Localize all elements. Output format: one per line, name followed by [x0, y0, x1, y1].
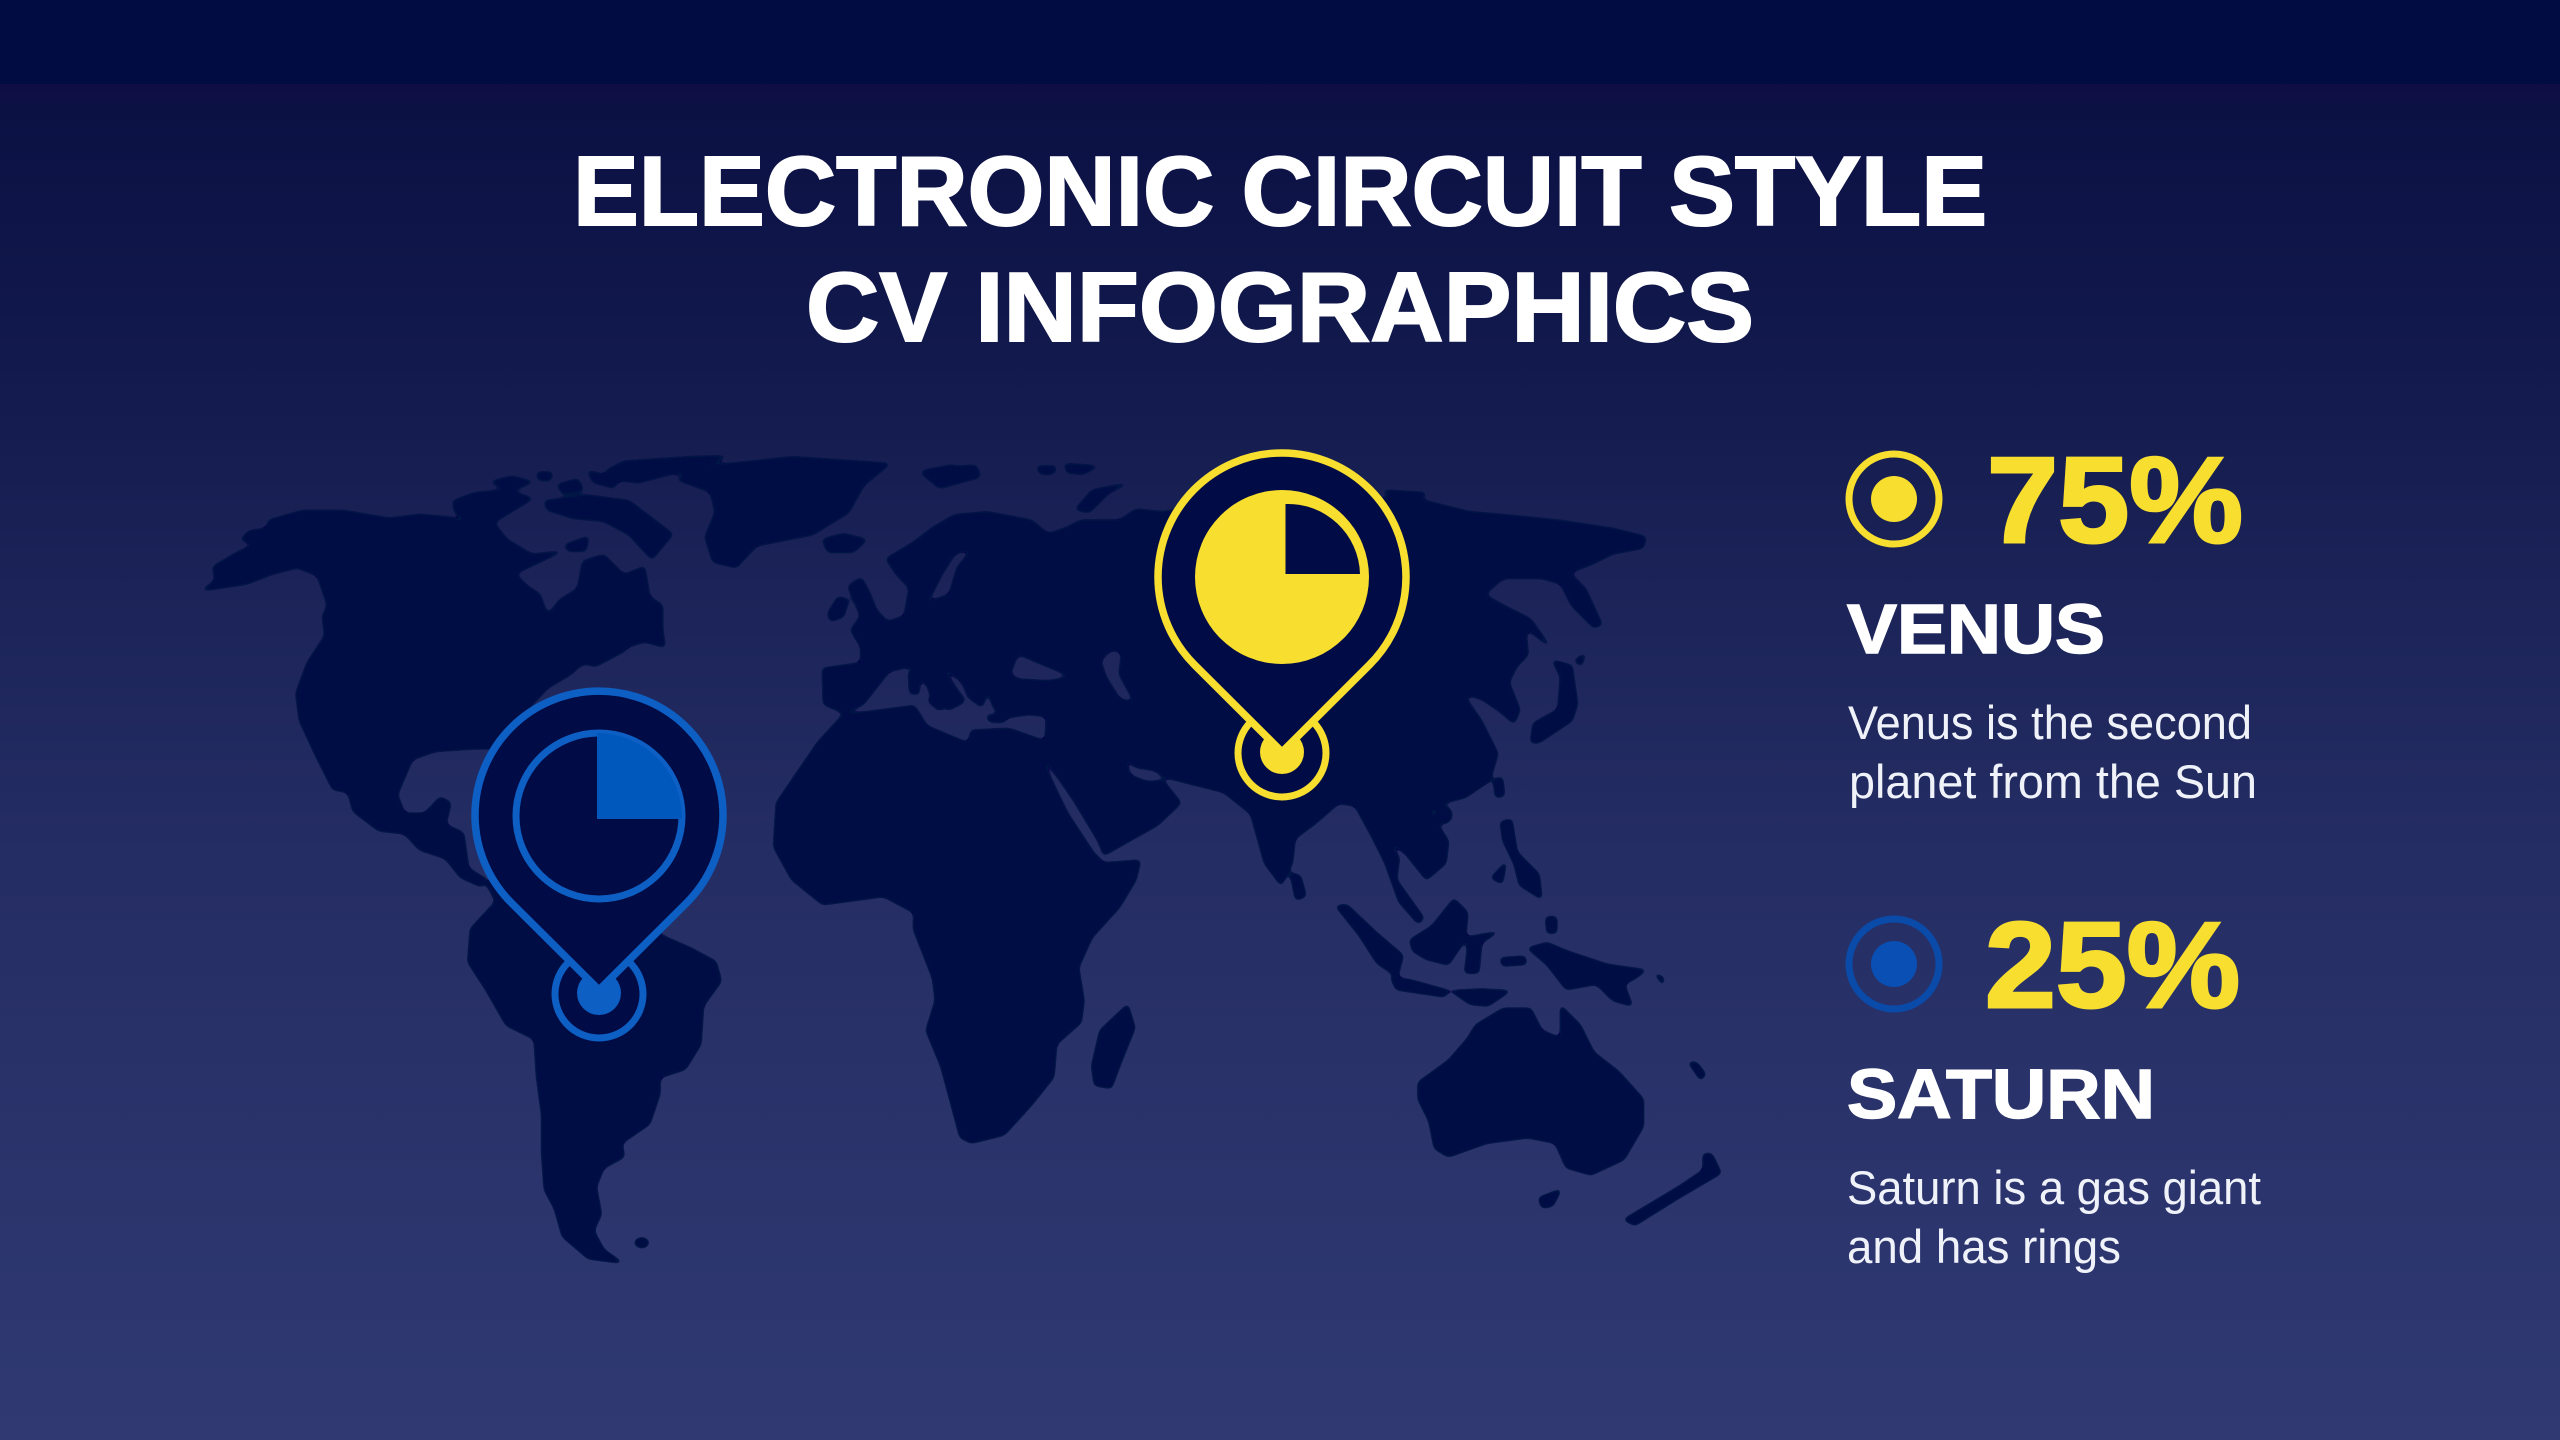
Venus heading: VENUS	[1847, 590, 2105, 668]
legend: Saturn	[1847, 897, 2261, 1273]
icon: yellow target	[1849, 454, 1939, 544]
Saturn heading: SATURN	[1847, 1055, 2155, 1133]
Venus description: planet from the Sun	[1849, 755, 2257, 808]
Venus description	[1848, 696, 2257, 808]
legend: Venus	[1847, 432, 2257, 808]
title: CV INFOGRAPHICS	[806, 252, 1754, 362]
Saturn description: and has rings	[1847, 1220, 2121, 1273]
Saturn percentage: 25%	[1985, 897, 2240, 1033]
Saturn description: Saturn is a gas giant	[1847, 1161, 2261, 1214]
Saturn description	[1847, 1161, 2261, 1273]
map: Eurasia, Africa and Oceania	[774, 464, 1721, 1225]
Venus description: Venus is the second	[1848, 696, 2252, 749]
pin: blue 25% in South America	[475, 691, 723, 1038]
world map	[203, 456, 1721, 1262]
Venus percentage: 75%	[1987, 432, 2243, 568]
title: ELECTRONIC CIRCUIT STYLE	[573, 136, 1987, 246]
title	[573, 136, 1987, 362]
map: Americas and Arctic	[203, 456, 980, 1262]
pin: yellow 75% in Asia	[1158, 453, 1406, 797]
icon: blue target	[1849, 919, 1939, 1009]
